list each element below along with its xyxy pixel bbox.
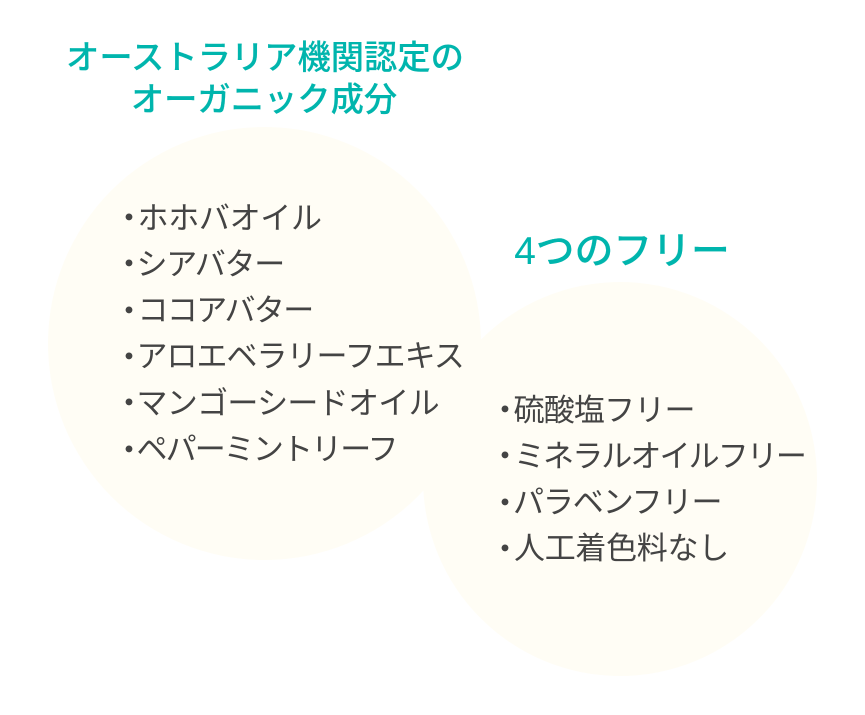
text block: organic list: シアバター: [136, 247, 284, 282]
text block: organic list: ホホバオイル: [138, 200, 322, 236]
panel: organic circle background: [48, 127, 481, 560]
text block: free list: [489, 392, 805, 567]
text block: free list: パラベンフリー: [513, 485, 721, 520]
text block: organic list: アロエベラリーフエキス: [136, 339, 464, 374]
text block: free list: 人工着色料なし: [514, 531, 729, 566]
heading: four frees: 4つのフリー: [514, 230, 730, 273]
text block: organic list: ペパーミントリーフ: [136, 432, 397, 467]
text block: organic list: ・: [113, 246, 145, 282]
text block: free list: ・: [489, 531, 521, 567]
text block: free list: ミネラルオイルフリー: [514, 439, 805, 474]
text block: organic list: ココアバター: [138, 293, 313, 328]
text block: organic list: ・: [113, 339, 145, 375]
text block: free list: ・: [489, 438, 521, 474]
heading: organic ingredients: オーストラリア機関認定の: [66, 40, 464, 77]
text block: organic list: ・: [113, 293, 145, 329]
text block: organic list: ・: [113, 432, 145, 468]
text block: free list: ・: [489, 485, 521, 521]
text block: free list: ・: [489, 392, 521, 428]
text block: organic list: マンゴーシードオイル: [136, 386, 439, 421]
text block: free list: 硫酸塩フリー: [514, 392, 695, 428]
text block: organic list: ・: [113, 200, 145, 236]
text block: organic list: ・: [113, 385, 145, 421]
panel: free circle background: [423, 282, 817, 676]
text block: organic list: [113, 200, 464, 468]
heading: organic ingredients line 2: オーガニック成分: [131, 82, 397, 118]
